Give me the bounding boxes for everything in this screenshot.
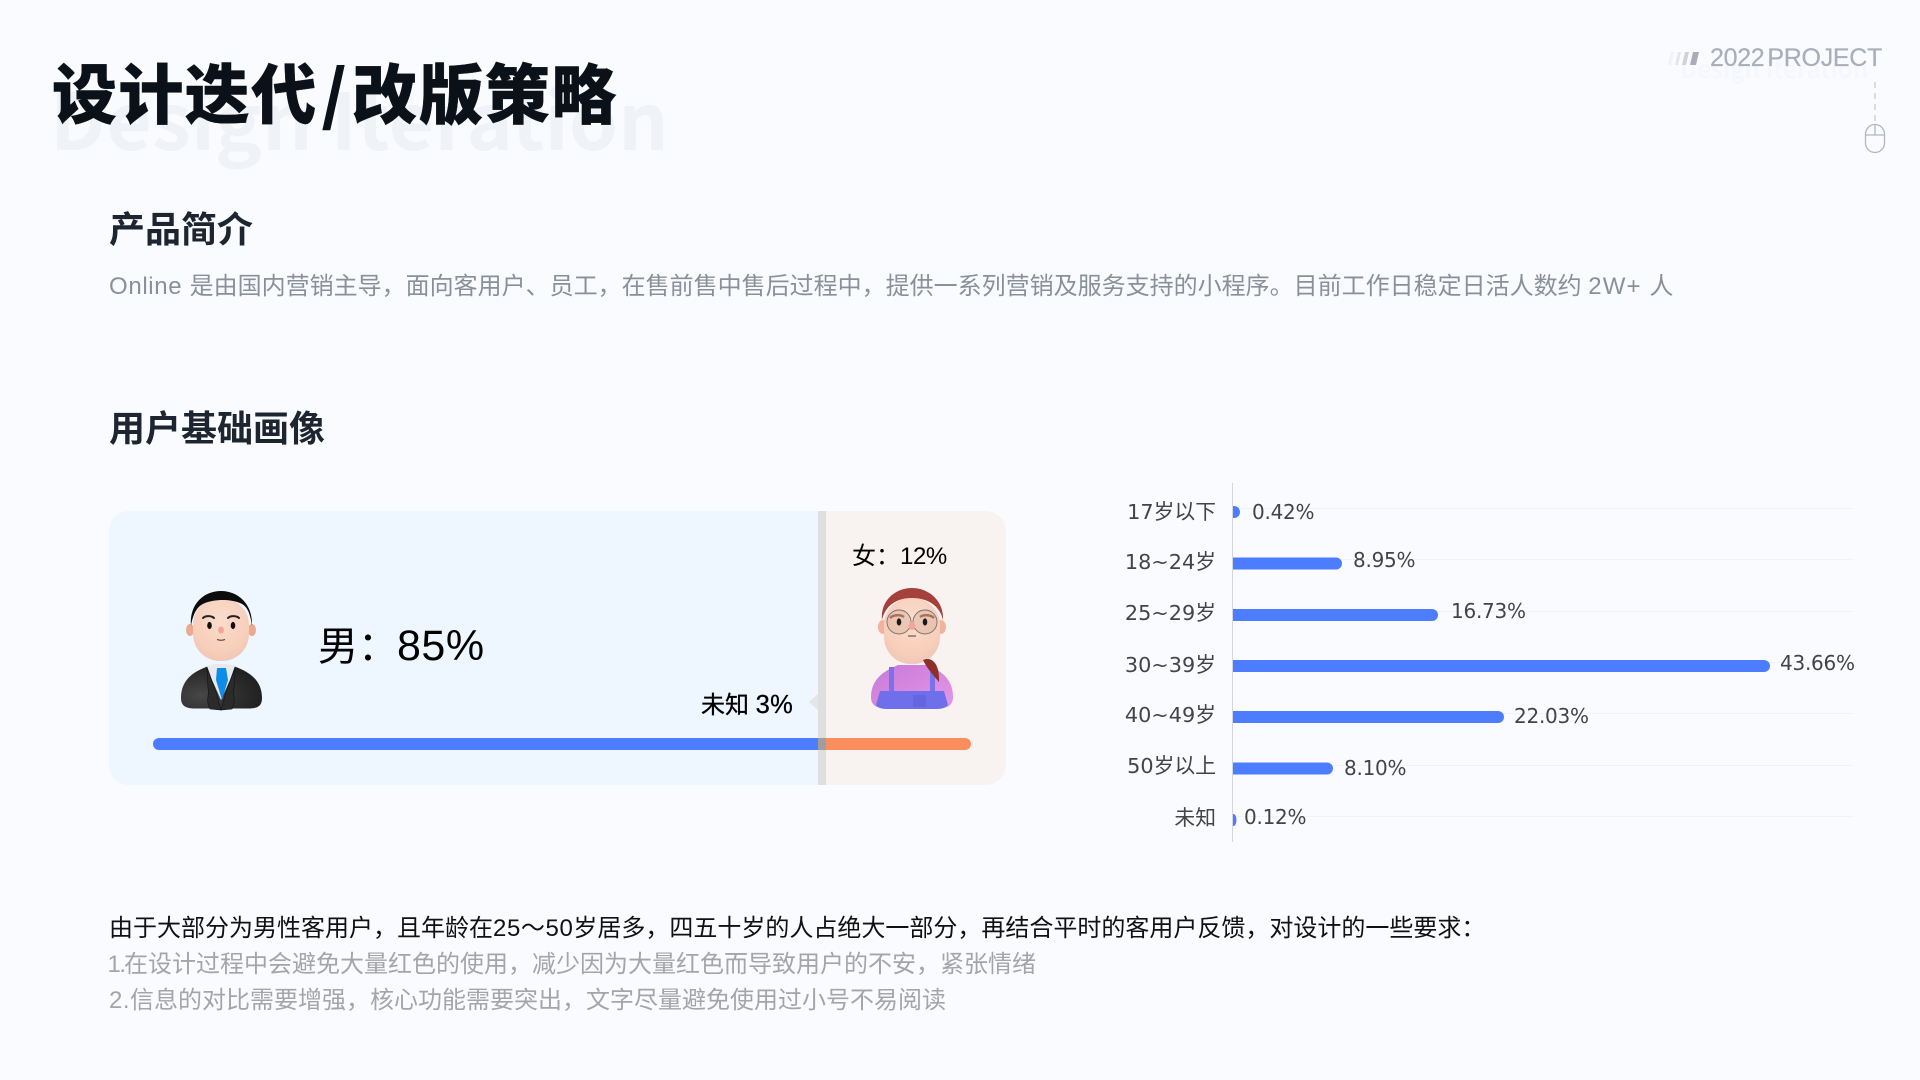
product intro text: Online 是由国内营销主导，面向客用户、员工，在售前售中售后过程中，提供一系列营销及服务支持的小程序。目前工作日稳定日活人数约 2W+ 人 [109, 273, 1673, 300]
panel: gender split [109, 511, 1006, 785]
male label: 男：85% [318, 622, 485, 670]
icon: female avatar [871, 588, 953, 709]
title: 设计迭代/改版策略 [52, 43, 618, 137]
chart plot: axis, grid and bars [1232, 483, 1854, 842]
requirement 2: 2.信息的对比需要增强，核心功能需要突出，文字尽量避免使用过小号不易阅读 [109, 987, 946, 1014]
heading: product intro: 产品简介 [109, 201, 253, 253]
conclusion lead sentence: 由于大部分为男性客用户，且年龄在25～50岁居多，四五十岁的人占绝大一部分，再结合平时的客用户反馈，对设计的一些要求： [109, 915, 1485, 942]
category: 30-39: 30~39岁 [1125, 653, 1216, 677]
conclusion text block [108, 915, 1485, 1014]
unknown label: 未知 3% [701, 691, 793, 719]
category: over 50: 50岁以上 [1127, 754, 1216, 778]
header tag: 2022 project [1668, 44, 1882, 72]
icon: scroll mouse [1864, 82, 1886, 154]
heading: user profile: 用户基础画像 [109, 400, 325, 452]
pointer for unknown [809, 694, 818, 710]
category: under 17: 17岁以下 [1127, 500, 1216, 524]
value 22.03%: 22.03% [1514, 704, 1589, 728]
female background [826, 511, 1006, 785]
category: 18-24: 18~24岁 [1125, 550, 1216, 574]
ghost project caption: Design Iteration [1680, 50, 1868, 85]
icon: slanted stripes [1668, 52, 1699, 65]
requirement 1: 1.在设计过程中会避免大量红色的使用，减少因为大量红色而导致用户的不安，紧张情绪 [108, 951, 1036, 978]
male background [109, 511, 818, 785]
female label: 女：12% [852, 543, 947, 570]
value 8.10%: 8.10% [1344, 756, 1406, 780]
icon: male avatar [181, 591, 262, 710]
value 0.12%: 0.12% [1244, 805, 1306, 829]
value 43.66%: 43.66% [1780, 651, 1855, 675]
value 0.42%: 0.42% [1252, 500, 1314, 524]
bar chart: age distribution [1125, 483, 1855, 842]
gender bar [153, 738, 971, 750]
value 16.73%: 16.73% [1451, 599, 1526, 623]
value 8.95%: 8.95% [1353, 548, 1415, 572]
project label: 2022PROJECT [1710, 44, 1882, 72]
category: unknown: 未知 [1174, 806, 1216, 830]
ghost background title: Design Iteration [50, 59, 669, 173]
category: 25-29: 25~29岁 [1125, 601, 1216, 625]
category: 40-49: 40~49岁 [1125, 703, 1216, 727]
unknown divider [818, 511, 826, 785]
